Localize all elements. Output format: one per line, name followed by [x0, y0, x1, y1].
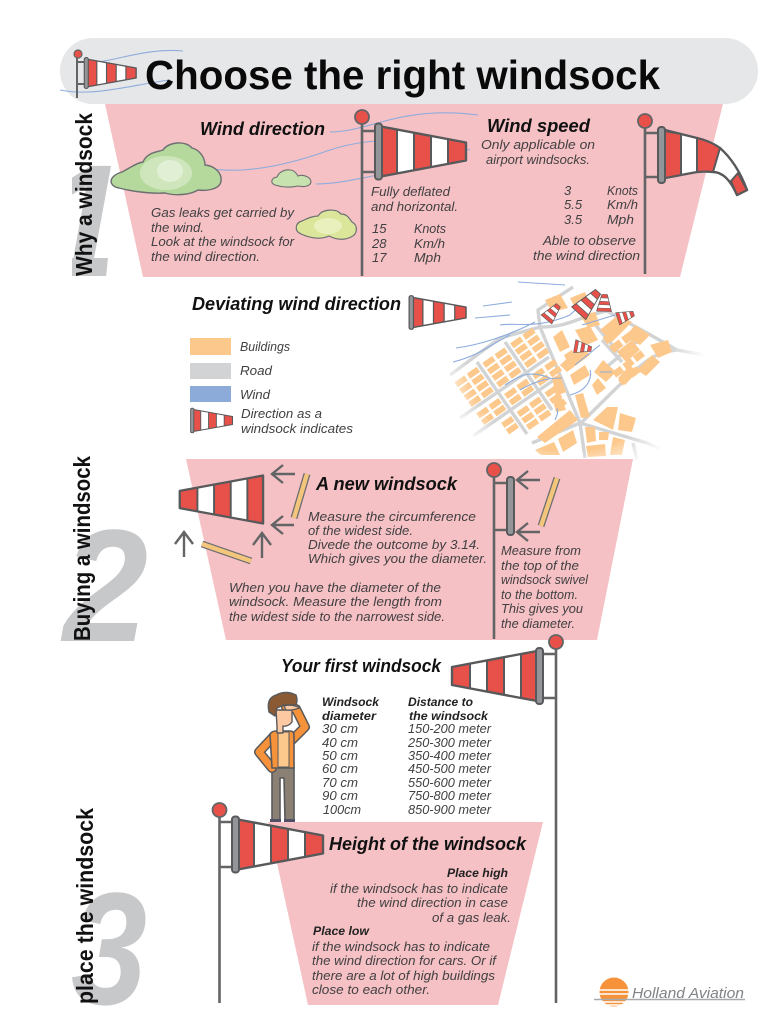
- table header: Distance to: [408, 695, 473, 709]
- text: measure length: [229, 580, 445, 624]
- text: fully deflated: Fully deflated: [371, 184, 451, 199]
- table rows: 60 cm: [322, 761, 358, 776]
- text: place high: if the windsock has to indicate: [330, 881, 508, 896]
- table rows: 750-800 meter: [408, 788, 492, 803]
- icon: person looking up: [259, 692, 305, 822]
- icon: measured windsock: [180, 476, 263, 524]
- text: fully deflated: Mph: [414, 250, 441, 265]
- text: place high: of a gas leak.: [432, 910, 511, 925]
- table rows: 50 cm: [322, 748, 358, 763]
- table rows: 30 cm: [322, 721, 358, 736]
- icon: map windsock 2: [572, 285, 605, 320]
- table rows: 350-400 meter: [408, 748, 492, 763]
- table rows: 150-200 meter: [408, 721, 492, 736]
- text: gas leaks: the wind direction.: [151, 249, 260, 264]
- title: Choose the right windsock: [145, 52, 660, 98]
- icon: first windsock on tall pole: [452, 635, 563, 1003]
- icon: yellow cloud: [296, 210, 356, 239]
- text: fully deflated: Knots: [414, 221, 446, 236]
- text: gas leaks: Gas leaks get carried by: [151, 205, 296, 220]
- text: fully deflated: and horizontal.: [371, 199, 458, 214]
- text: measure swivel: This gives you: [501, 601, 583, 616]
- wind lines on map: [453, 282, 615, 420]
- legend: buildings: Buildings: [240, 339, 290, 354]
- table rows: 70 cm: [322, 775, 358, 790]
- text: gas leaks: the wind.: [151, 220, 204, 235]
- text: gas leaks: [151, 205, 296, 264]
- text: fully deflated: 17: [372, 250, 387, 265]
- text: measure circumference: [308, 509, 487, 566]
- text: wind speed: [481, 137, 640, 263]
- icon: deviating windsock: [409, 296, 466, 329]
- text: measure length: windsock. Measure the length from: [229, 594, 442, 609]
- icon: map windsock 5: [573, 340, 592, 355]
- table rows: 450-500 meter: [408, 761, 492, 776]
- text: measure length: the widest side to the narrowest side.: [229, 609, 445, 624]
- icon: small green cloud: [272, 170, 311, 187]
- text: measure circumference: Which gives you the diameter.: [308, 551, 487, 566]
- table rows: 550-600 meter: [408, 775, 492, 790]
- town block: lattice of small houses: [454, 328, 567, 434]
- text: place high: Place high: [447, 866, 508, 880]
- text: fully deflated: [371, 184, 458, 265]
- text: place low: close to each other.: [312, 982, 430, 997]
- text: measure swivel: the diameter.: [501, 616, 575, 631]
- icon: drooping windsock: [638, 114, 747, 274]
- text: place low: Place low: [313, 924, 370, 938]
- text: measure length: When you have the diameter of the: [229, 580, 441, 595]
- logo: Holland Aviation: [594, 978, 745, 1006]
- text: wind speed: Able to observe: [542, 233, 636, 248]
- table rows: 90 cm: [322, 788, 358, 803]
- text: wind speed: Km/h: [607, 197, 638, 212]
- table rows: 40 cm: [322, 735, 358, 750]
- section label: why a windsock: Why a windsock: [71, 113, 97, 276]
- text: measure circumference: of the widest side.: [308, 523, 413, 538]
- text: wind speed: 3.5: [564, 212, 583, 227]
- arrows: measuring circumference: [175, 465, 295, 558]
- text: wind speed: Mph: [607, 212, 634, 227]
- text: wind speed: the wind direction: [533, 248, 640, 263]
- text: measure swivel: windsock swivel: [501, 572, 589, 587]
- table rows: [322, 721, 492, 817]
- number 1: 1: [42, 131, 126, 310]
- table header: Windsock: [322, 695, 380, 709]
- table: windsock diameter and distance: [322, 695, 492, 817]
- section label: place the windsock: place the windsock: [72, 808, 98, 1004]
- legend: windsock direction: windsock indicates: [241, 421, 354, 436]
- legend: [190, 338, 354, 436]
- wind lines: [175, 113, 478, 184]
- heading: height of the windsock: Height of the windsock: [329, 834, 527, 854]
- icon: map windsock 3: [597, 294, 612, 312]
- text: place high: [330, 866, 511, 925]
- table rows: 250-300 meter: [407, 735, 492, 750]
- icon: ruler upright: [294, 474, 307, 518]
- title banner: [60, 38, 758, 104]
- text: place low: if the windsock has to indicate: [312, 939, 490, 954]
- legend: windsock direction: Direction as a: [241, 406, 322, 421]
- text: place high: the wind direction in case: [357, 895, 508, 910]
- text: fully deflated: Km/h: [414, 236, 445, 251]
- icon: map windsock 4: [616, 307, 636, 325]
- panel: a new windsock: [175, 459, 633, 640]
- text: measure swivel: the top of the: [501, 558, 579, 573]
- text: fully deflated: 15: [372, 221, 387, 236]
- legend: road: Road: [240, 363, 273, 378]
- text: wind speed: 3: [564, 183, 572, 198]
- icon: horizontal windsock: [355, 110, 466, 276]
- section label: buying a windsock: Buying a windsock: [69, 456, 95, 641]
- icon: height windsock on pole: [212, 803, 323, 1003]
- icon: pole with swivel and arrows: [487, 463, 557, 639]
- text: fully deflated: 28: [371, 236, 387, 251]
- text: wind speed: 5.5: [564, 197, 583, 212]
- text: measure circumference: Measure the circumference: [308, 509, 476, 524]
- table header: the windsock: [409, 709, 489, 723]
- table rows: 850-900 meter: [408, 802, 492, 817]
- icon: large green cloud: [111, 143, 221, 195]
- text: place low: the wind direction for cars. Or if: [312, 953, 497, 968]
- text: gas leaks: Look at the windsock for: [151, 234, 295, 249]
- text: place low: there are a lot of high buildings: [312, 968, 496, 983]
- text: place low: [312, 924, 497, 997]
- legend: road: [190, 363, 273, 379]
- legend: wind: Wind: [240, 387, 271, 402]
- text: measure swivel: to the bottom.: [501, 587, 578, 602]
- panel: why a windsock: [105, 104, 747, 277]
- legend: windsock direction: [191, 406, 354, 436]
- icon: map windsock 1: [541, 301, 564, 324]
- text: wind speed: Knots: [607, 183, 638, 198]
- number 2: 2: [60, 496, 148, 675]
- heading: your first windsock: Your first windsock: [281, 656, 442, 676]
- icon: ruler flat: [202, 544, 251, 561]
- logo: Holland Aviation: Holland Aviation: [632, 986, 744, 1002]
- text: measure circumference: Divede the outcome by 3.14.: [308, 537, 480, 552]
- heading: deviating wind direction: Deviating wind direction: [192, 294, 401, 314]
- text: measure swivel: Measure from: [501, 543, 581, 558]
- icon: title windsock: [74, 50, 136, 98]
- text: wind speed: Only applicable on: [481, 137, 595, 152]
- heading: wind speed: Wind speed: [487, 116, 591, 136]
- table header: diameter: [322, 709, 377, 723]
- text: wind speed: airport windsocks.: [486, 152, 590, 167]
- heading: a new windsock: A new windsock: [315, 474, 458, 494]
- legend: buildings: [190, 338, 290, 355]
- table header: [322, 695, 489, 723]
- table rows: 100cm: [323, 802, 361, 817]
- text: measure swivel: [501, 543, 589, 631]
- panel: height of the windsock: [268, 822, 543, 1005]
- map: town with buildings, roads and wind: [450, 282, 705, 460]
- legend: wind: [190, 386, 271, 402]
- heading: wind direction: Wind direction: [200, 119, 325, 139]
